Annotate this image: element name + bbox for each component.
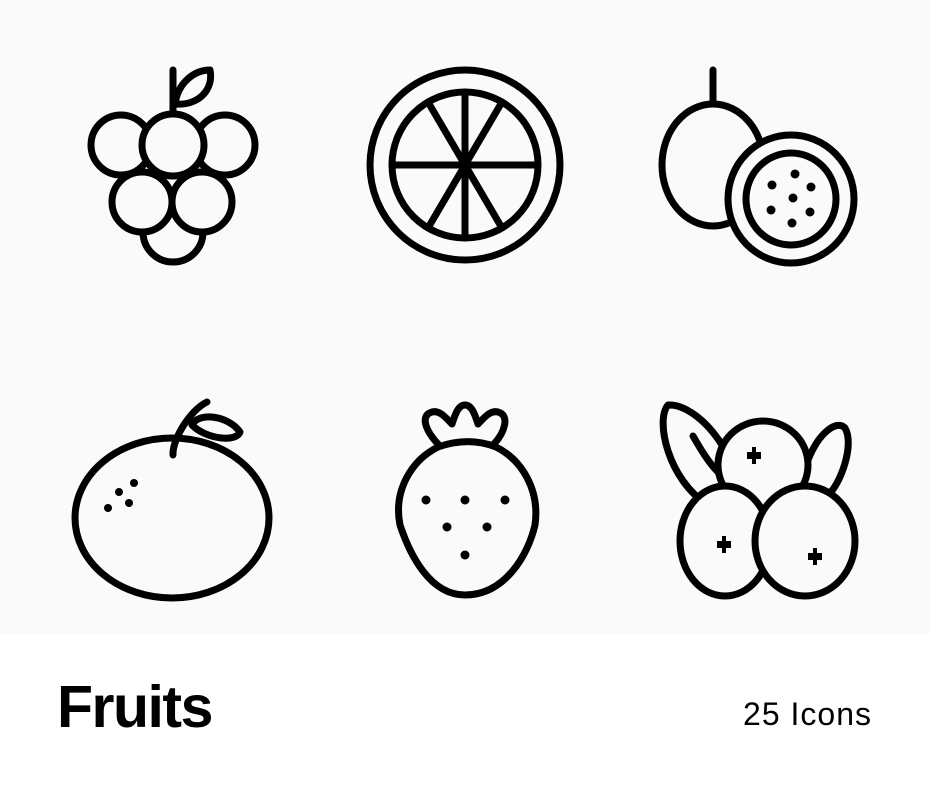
icon: berries [663,405,855,596]
icon: grapes [91,70,255,262]
icon: strawberry [399,405,536,595]
icon count: 25 Icons [743,696,872,732]
icon: orange [75,402,269,598]
title: Fruits [57,674,212,740]
icon: passion fruit [662,70,854,263]
icon: orange slice [370,70,560,260]
